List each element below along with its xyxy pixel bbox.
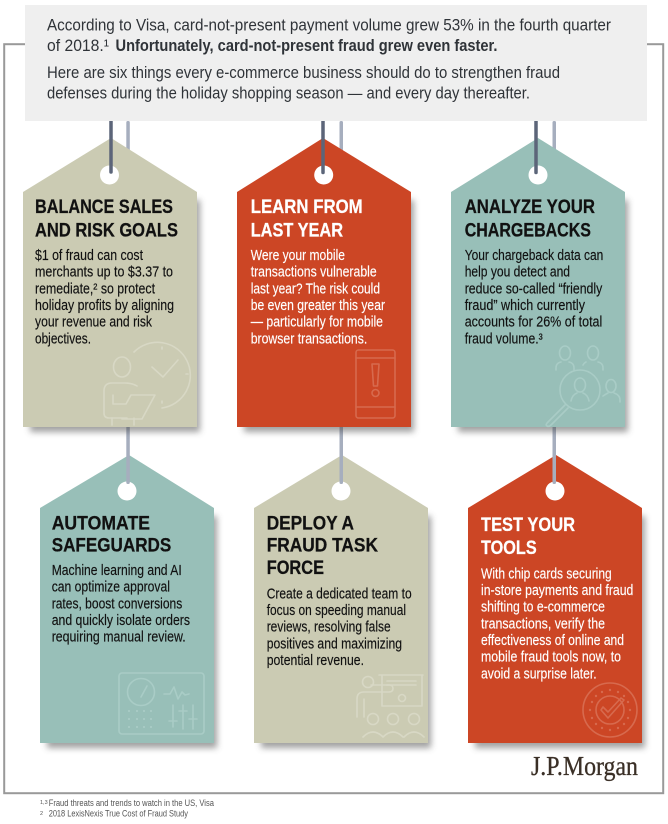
text: intro statistic: of 2018.¹: [47, 37, 109, 55]
heading: deploy a fraud task force: [267, 512, 378, 579]
dark hanging strings: [111, 121, 536, 172]
light hanging strings: [126, 121, 556, 484]
text: balance body: [35, 248, 174, 347]
text: test your tools body: in-store payments and fraud: [481, 583, 633, 599]
heading: deploy a fraud task force: FORCE: [267, 557, 324, 579]
heading: test your tools: TOOLS: [481, 537, 537, 559]
heading: balance sales and risk goals: BALANCE SALES: [35, 196, 173, 218]
icon: magnifier over people: [546, 346, 620, 426]
text: analyze body: accounts for 26% of total: [465, 315, 602, 331]
text: automate safeguards body: rates, boost conversions: [52, 596, 182, 612]
text: analyze body: Your chargeback data can: [465, 248, 603, 264]
text: learn body: last year? The risk could: [251, 281, 380, 297]
heading: automate safeguards: AUTOMATE: [52, 512, 150, 534]
text: learn body: transactions vulnerable: [251, 265, 377, 281]
heading: automate safeguards: SAFEGUARDS: [52, 535, 171, 557]
heading: learn from last year: LAST YEAR: [251, 220, 343, 242]
text: balance body: merchants up to $3.37 to: [35, 265, 173, 281]
text: balance body: $1 of fraud can cost: [35, 248, 143, 264]
text: learn body: [251, 248, 385, 347]
text: deploy body: Create a dedicated team to: [267, 586, 412, 602]
panel: balance sales and risk goals tag: [23, 138, 200, 432]
text: balance body: remediate,² so protect: [35, 281, 155, 297]
heading: analyze your chargebacks: [465, 196, 595, 242]
text: balance body: objectives.: [35, 331, 91, 347]
text: intro summary: [47, 64, 560, 103]
heading: deploy a fraud task force: FRAUD TASK: [267, 535, 378, 557]
text: learn body: be even greater this year: [251, 298, 385, 314]
text: test your tools body: effectiveness of online and: [481, 633, 624, 649]
text: deploy body: potential revenue.: [267, 653, 364, 669]
text: automate safeguards body: Machine learning and AI: [52, 563, 182, 579]
text: analyze body: [465, 248, 603, 347]
panel: deploy a fraud task force tag: [254, 455, 431, 748]
icon: phone with exclamation mark: [356, 350, 395, 418]
text: intro summary: Here are six things every e-commerce business should do to strengthen fraud: [47, 64, 560, 82]
text: learn body: Were your mobile: [251, 248, 345, 264]
heading: learn from last year: LEARN FROM: [251, 196, 363, 218]
text: test your tools body: transactions, verify the: [481, 616, 605, 632]
heading: balance sales and risk goals: AND RISK GOALS: [35, 220, 178, 242]
text: balance body: your revenue and risk: [35, 315, 153, 331]
text: analyze body: fraud” which currently: [465, 298, 586, 314]
text: learn body: browser transactions.: [251, 331, 367, 347]
heading: deploy a fraud task force: DEPLOY A: [267, 512, 354, 534]
panel: learn from last year tag: [237, 138, 414, 432]
footnotes: 2: [40, 811, 43, 817]
heading: learn from last year: [251, 196, 363, 242]
heading: test your tools: TEST YOUR: [481, 514, 575, 536]
footnotes: 2018 LexisNexis True Cost of Fraud Study: [49, 808, 188, 818]
heading: automate safeguards: [52, 512, 171, 557]
text: automate safeguards body: [52, 563, 190, 646]
text: test your tools body: mobile fraud tools now, to: [481, 650, 621, 666]
logo: J.P.Morgan: J.P.Morgan: [531, 751, 638, 781]
heading: balance sales and risk goals: [35, 196, 178, 242]
footnotes: 1,3: [40, 800, 48, 806]
panel: analyze your chargebacks tag: [451, 138, 628, 432]
text: learn body: — particularly for mobile: [251, 315, 383, 331]
text: test your tools body: With chip cards securing: [481, 566, 612, 582]
text: intro statistic: Unfortunately, card-not-present fraud grew even faster.: [116, 37, 498, 55]
text: automate safeguards body: requiring manual review.: [52, 630, 186, 646]
text: test your tools body: shifting to e-commerce: [481, 600, 605, 616]
footnotes: Fraud threats and trends to watch in the US, Visa: [49, 798, 214, 808]
text: test your tools body: avoid a surprise later.: [481, 666, 597, 682]
header panel: [25, 5, 647, 121]
heading: analyze your chargebacks: CHARGEBACKS: [465, 220, 591, 242]
icon: person with laptop and clock: [104, 342, 190, 425]
footnotes: [40, 798, 214, 818]
heading: test your tools: [481, 514, 575, 559]
text: analyze body: fraud volume.³: [465, 331, 543, 347]
text: deploy body: reviews, resolving false: [267, 620, 391, 636]
text: deploy body: positives and maximizing: [267, 636, 402, 652]
text: intro statistic: [47, 16, 611, 55]
text: automate safeguards body: and quickly isolate orders: [52, 613, 190, 629]
text: test your tools body: [481, 566, 633, 682]
text: intro summary: defenses during the holiday shopping season — and every day thereafter.: [47, 85, 530, 103]
text: automate safeguards body: can optimize approval: [52, 580, 170, 596]
text: balance body: holiday profits by aligning: [35, 298, 174, 314]
text: deploy body: [267, 586, 412, 669]
icon: seal with check mark: [583, 683, 637, 737]
icon: dashboard: [119, 673, 204, 734]
text: intro statistic: According to Visa, card-not-present payment volume grew 53% in the fourth quarter: [47, 16, 611, 34]
text: analyze body: help you detect and: [465, 265, 570, 281]
text: deploy body: focus on speeding manual: [267, 603, 406, 619]
panel: test your tools tag: [468, 455, 645, 748]
icon: presenter with audience: [357, 675, 424, 737]
panel: automate safeguards tag: [40, 455, 217, 748]
heading: analyze your chargebacks: ANALYZE YOUR: [465, 196, 595, 218]
text: analyze body: reduce so-called “friendly: [465, 281, 603, 297]
